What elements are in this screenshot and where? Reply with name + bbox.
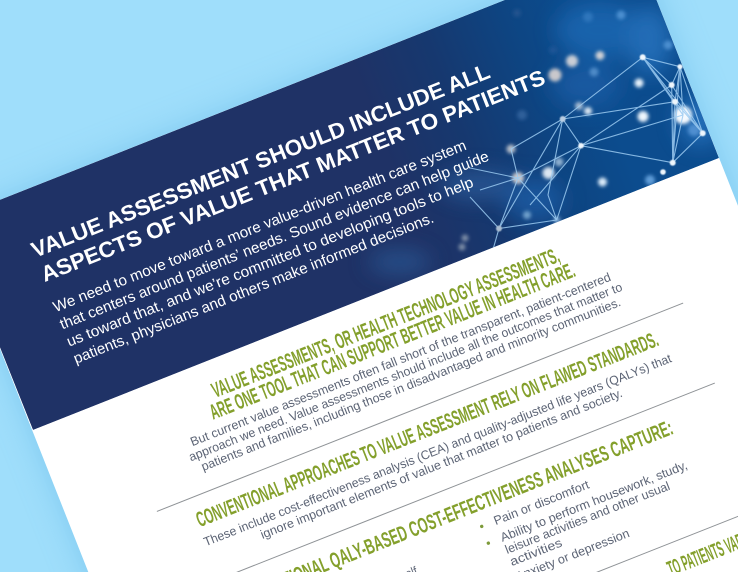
divider 3 bbox=[237, 506, 738, 572]
panel: navy header with network image bbox=[0, 0, 722, 430]
bullet list: right column: Ability to perform housework, study, bbox=[498, 458, 689, 545]
heading: value assessments bbox=[199, 240, 578, 424]
bullet list: right column bbox=[478, 441, 705, 572]
divider 1 bbox=[157, 303, 683, 511]
intro text: We need to move toward a more value-driven health care system bbox=[51, 137, 469, 316]
intro text: us toward that, and we’re committed to developing tools to help bbox=[64, 174, 476, 350]
text: conventional approaches: ignore important elements of value that matter to patients and society. bbox=[258, 386, 624, 542]
heading: elements that matter to patients bbox=[664, 520, 738, 572]
bullet list: right column: Pain or discomfort bbox=[492, 477, 592, 528]
title: ASPECTS OF VALUE THAT MATTER TO PATIENTS bbox=[37, 65, 549, 287]
divider 2 bbox=[189, 383, 715, 572]
title: VALUE ASSESSMENT SHOULD INCLUDE ALL bbox=[28, 59, 493, 263]
bullet list: right column: activities bbox=[508, 536, 564, 569]
intro text: patients, physicians and others make informed decisions. bbox=[71, 210, 436, 368]
intro text: that centers around patients’ needs. Sound evidence can help guide bbox=[57, 148, 491, 333]
text: value assessments: approach we need. Value assessments should include all the outcomes that matter to bbox=[187, 280, 624, 464]
text: value assessments: patients and families, including those in disadvantaged and minority communities. bbox=[199, 295, 623, 474]
text: conventional approaches: These include cost-effectiveness analysis (CEA) and quality-adjusted life years (QALYs) that bbox=[202, 351, 674, 549]
text: value assessments: But current value assessments often fall short of the transparent, patient-centered bbox=[188, 270, 613, 449]
bullet list: right column: leisure activities and other usual bbox=[503, 479, 672, 557]
